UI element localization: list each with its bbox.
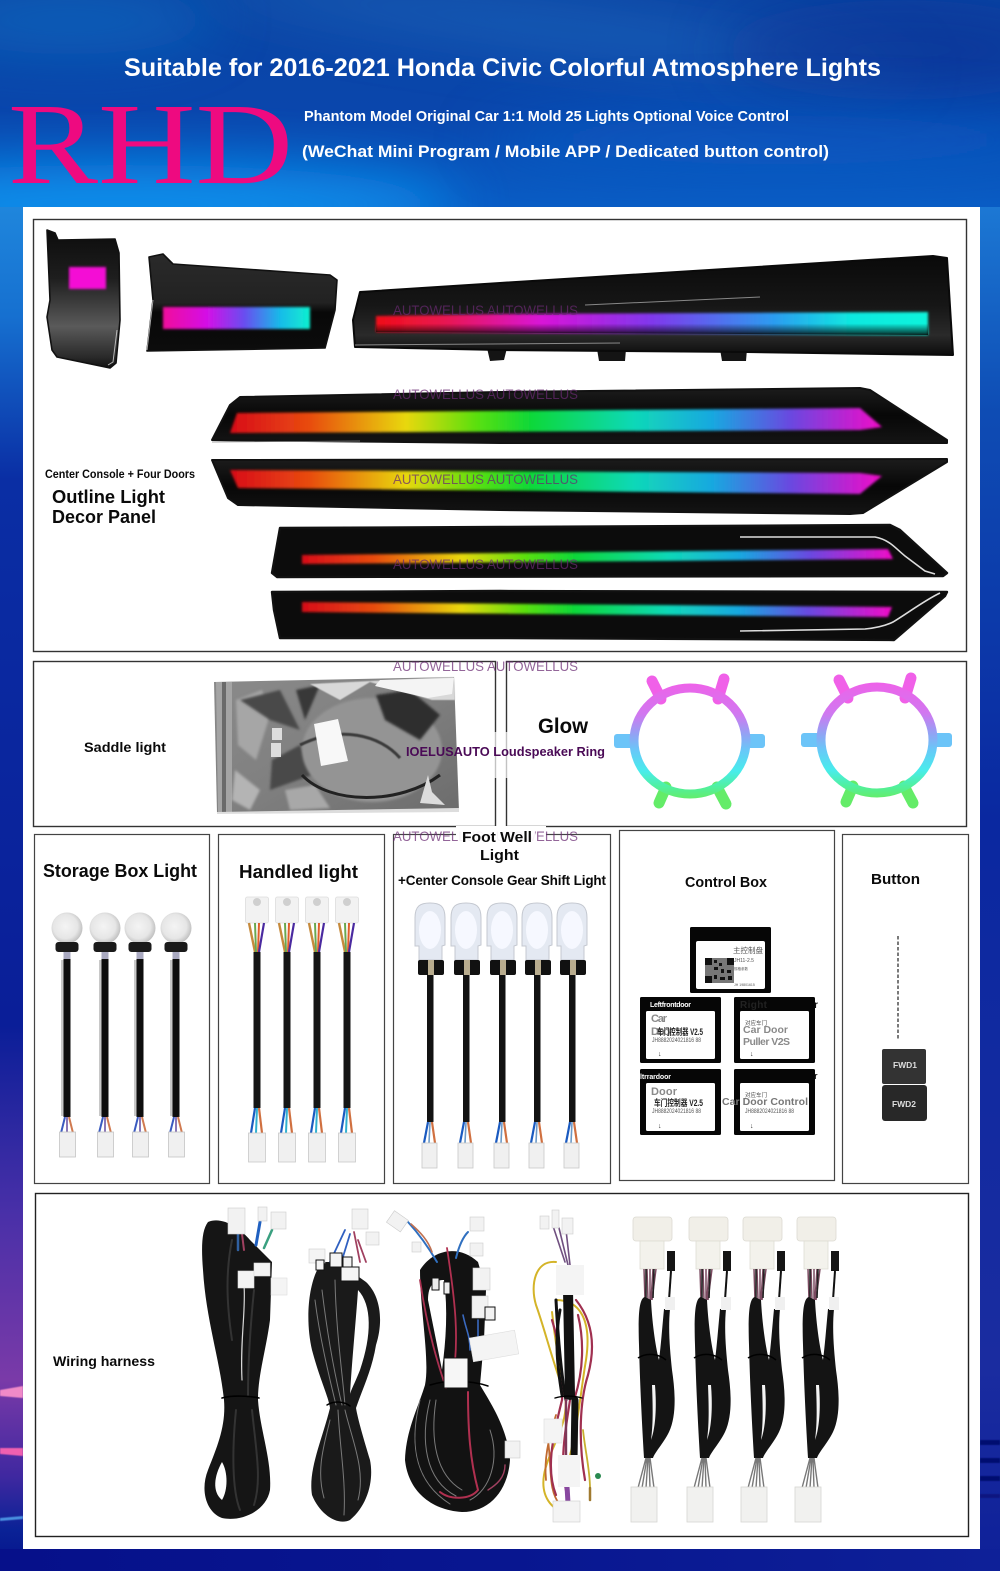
label: loudspeaker ring: IOELUSAUTO Loudspeaker Ring — [406, 745, 605, 759]
module: right front door: Right — [740, 1000, 768, 1011]
part: rear door strip lower — [272, 591, 947, 640]
harness 2: black cable loop — [308, 1209, 380, 1522]
part: front door strip upper — [212, 388, 947, 443]
module: right front door — [734, 997, 818, 1063]
panel: foot well light — [393, 826, 610, 1184]
module: left front door: Car — [651, 1013, 668, 1025]
label: center console and doors: Center Console + Four Doors — [45, 469, 195, 481]
module: right rear door — [722, 1069, 818, 1135]
subtitle: control methods: (WeChat Mini Program / Mobile APP / Dedicated button control) — [302, 142, 829, 161]
storage lights row — [52, 912, 192, 1157]
watermark: top panel row 2: AUTOWELLUS AUTOWELLUS — [393, 386, 578, 402]
panel: control box — [620, 830, 834, 1180]
module: main controller: JH11-2.5 — [734, 958, 754, 964]
icon: FWD1 button: FWD1 — [893, 1060, 917, 1070]
RHD mark: RHD — [8, 81, 293, 209]
module: right rear door: r — [814, 1071, 818, 1081]
part: long dashboard panel — [353, 256, 953, 361]
harness 3: black and red cable coil — [386, 1211, 520, 1512]
foot well lights row — [415, 903, 587, 1168]
watermark: top panel row 1: AUTOWELLUS AUTOWELLUS — [393, 302, 578, 318]
heading mask — [456, 826, 546, 846]
watermark: foot well row: AUTOWELLUS AUTOWELLUS — [393, 828, 578, 844]
module: right front door: 对应车门 — [745, 1019, 767, 1027]
module: left front door: JH8882024021816 88 — [652, 1038, 702, 1044]
icon: FWD2 button: FWD2 — [892, 1099, 916, 1109]
module: left rear door: 车门控制器 V2.5 — [654, 1097, 703, 1108]
heading: button: Button — [871, 872, 920, 888]
watermark: saddle row: AUTOWELLUS AUTOWELLUS — [393, 658, 578, 674]
module: left front door — [640, 997, 721, 1063]
watermark: top panel row 3: AUTOWELLUS AUTOWELLUS — [393, 471, 578, 487]
label: glow: Glow — [538, 715, 589, 738]
module: left rear door — [640, 1069, 721, 1135]
module: right rear door: 对应车门 — [745, 1091, 767, 1099]
panel: outline light decor panels — [34, 220, 966, 652]
module: main controller: 规格参数 — [734, 966, 748, 971]
module: main controller — [690, 927, 771, 993]
module: right rear door: JH8882024021816 88 — [745, 1109, 795, 1115]
icon: FWD1 button — [882, 1049, 926, 1084]
module: right rear door: Car Door Control — [722, 1096, 808, 1108]
harness 5: four door adapter looms — [631, 1217, 839, 1522]
panel: glow loudspeaker ring — [506, 662, 966, 826]
module: main controller: JH 19801615 — [734, 983, 755, 987]
title: Suitable for 2016-2021 Honda Civic Colorful Atmosphere Lights — [124, 54, 881, 82]
label: wiring harness: Wiring harness — [53, 1353, 155, 1369]
icon: QR code — [705, 958, 734, 983]
label: outline light decor panel: Outline Light — [52, 487, 165, 507]
part: center console cap — [47, 230, 120, 368]
module: left front door: Door — [651, 1026, 674, 1038]
heading: handled light: Handled light — [239, 862, 358, 882]
label: outline light decor panel — [52, 487, 165, 527]
heading mask top — [459, 829, 535, 844]
subheading: gear shift light: +Center Console Gear Shift Light — [398, 873, 606, 888]
module: left rear door: Door — [651, 1086, 678, 1098]
heading: foot well light: Foot Well — [462, 829, 532, 846]
heading: control box: Control Box — [685, 875, 767, 891]
module: left rear door: JH8882024021816 88 — [652, 1109, 702, 1115]
heading: storage box light: Storage Box Light — [43, 861, 197, 881]
panel: storage box light — [34, 834, 210, 1184]
label: outline light decor panel: Decor Panel — [52, 507, 156, 527]
module: right front door: r — [814, 1000, 818, 1011]
icon: speaker ring left — [614, 679, 765, 804]
module: left front door: 车门控制器 V2.5 — [657, 1026, 703, 1037]
part: short door panel — [147, 254, 337, 351]
watermark: top panel row 4: AUTOWELLUS AUTOWELLUS — [393, 556, 578, 572]
dashed connector — [897, 936, 899, 1040]
module: right rear door: ↓ — [750, 1123, 754, 1130]
heading: foot well light: Light — [480, 847, 519, 864]
harness 4: power loom red yellow — [534, 1210, 601, 1522]
module: left rear door: ltrrardoor — [640, 1074, 671, 1081]
panel: handle light — [218, 834, 384, 1184]
part: front door strip lower — [212, 459, 947, 514]
handle lights row — [246, 897, 358, 1162]
icon: speaker ring right — [801, 678, 952, 803]
module: left rear door: ↓ — [658, 1123, 662, 1130]
icon: FWD2 button — [882, 1085, 927, 1121]
module: main controller: 主控制盘 — [733, 945, 763, 955]
module: left front door: ↓ — [658, 1051, 662, 1058]
panel: button — [842, 834, 968, 1184]
module: right front door: ↓ — [750, 1051, 754, 1058]
harness 1: fabric taped loom — [202, 1207, 287, 1519]
subtitle: model and options: Phantom Model Original Car 1:1 Mold 25 Lights Optional Voice Control — [304, 108, 789, 125]
soft mask on divider — [494, 732, 508, 778]
heading: foot well light — [462, 829, 532, 864]
module: right front door: Puller V2S — [743, 1036, 790, 1048]
label: saddle light: Saddle light — [84, 739, 166, 755]
panel: saddle light — [34, 662, 496, 826]
panel: wiring harness — [36, 1194, 968, 1536]
photo: bagged saddle light — [214, 677, 459, 814]
module: right front door: Car Door — [743, 1024, 788, 1036]
module: left front door: Leftfrontdoor — [650, 1002, 691, 1009]
part: rear door strip upper — [272, 525, 947, 577]
